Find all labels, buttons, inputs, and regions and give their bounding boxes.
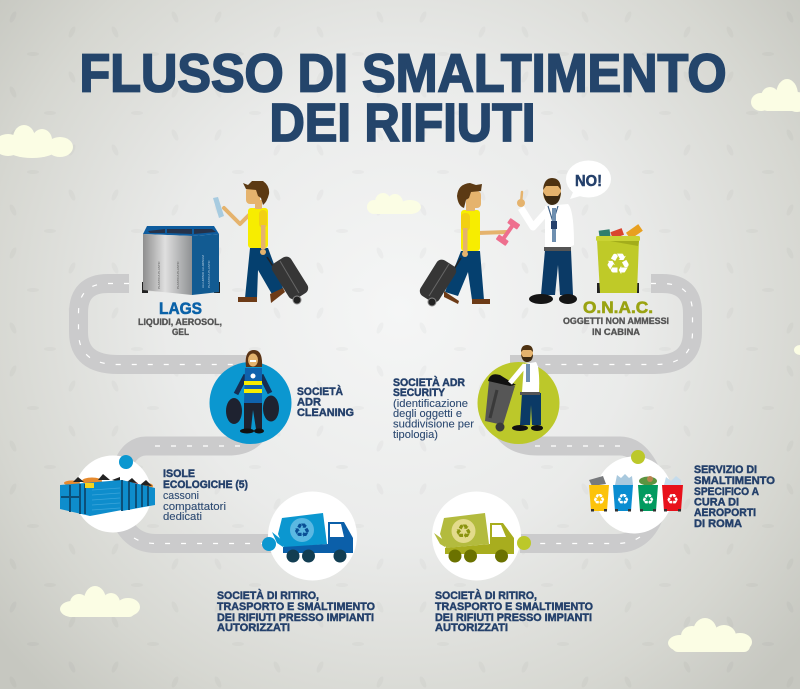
text: Società ADR Security: (identificazione	[393, 398, 468, 410]
icon: security officer	[517, 178, 577, 304]
text: Servizio di smaltimento: AEROPORTI	[694, 507, 756, 519]
text: left disposal company: DEI RIFIUTI PRESSO IMPIANTI	[217, 612, 374, 624]
icon: LAGS recycling bin: PLASTICA PLASTIC	[157, 260, 161, 289]
text: right disposal company: SOCIETÀ DI RITIRO,	[435, 589, 537, 602]
cloud: centre	[367, 193, 421, 214]
text: Società ADR Cleaning	[297, 385, 354, 419]
text: LAGS description: GEL	[172, 327, 189, 338]
text: Società ADR Security	[393, 376, 474, 441]
text: left disposal company: AUTORIZZATI	[217, 622, 290, 634]
text: Isole ecologiche: ISOLE	[163, 468, 195, 480]
text: Società ADR Security: SECURITY	[393, 387, 446, 399]
cloud: top right	[751, 79, 800, 112]
road: right side middle	[500, 425, 650, 470]
text: Servizio di smaltimento: SPECIFICO A	[694, 486, 759, 498]
callout: NO!: NO!	[575, 173, 602, 190]
callout: NO!	[566, 160, 611, 199]
text: right disposal company: AUTORIZZATI	[435, 622, 508, 634]
title	[80, 44, 726, 153]
text: Isole ecologiche: compattatori	[163, 501, 226, 513]
icon: traveller with bottle	[213, 181, 310, 304]
title: DEI RIFIUTI	[270, 94, 536, 153]
text: right disposal company: DEI RIFIUTI PRESSO IMPIANTI	[435, 612, 592, 624]
text: Isole ecologiche: dedicati	[163, 511, 202, 523]
icon: compactor containers in white circle	[60, 455, 155, 532]
icon: O.N.A.C. bin	[596, 224, 643, 293]
text: LAGS description	[138, 317, 222, 338]
text: Servizio di smaltimento: DI ROMA	[694, 518, 742, 530]
icon: cleaning operator in blue circle	[210, 350, 292, 444]
icon: O.N.A.C. bin: ♻	[605, 247, 631, 281]
icon: green recycling truck in white circle	[432, 492, 531, 580]
icon: four sorted waste bins in white circle	[589, 450, 683, 534]
text: Servizio di smaltimento: SERVIZIO DI	[694, 464, 757, 476]
text: Servizio di smaltimento: SMALTIMENTO	[694, 475, 775, 487]
icon: four sorted waste bins in white circle: ♻	[666, 492, 679, 508]
text: Società ADR Security: tipologia)	[393, 429, 438, 441]
icon: traveller with dumbbell	[418, 183, 520, 306]
text: Società ADR Security: SOCIETÀ ADR	[393, 376, 465, 389]
icon: LAGS recycling bin: ALLUMINIO ALUMINUM	[201, 255, 205, 288]
text: right disposal company	[435, 589, 593, 634]
cloud: right edge	[794, 345, 800, 355]
text: Isole ecologiche	[163, 468, 248, 523]
icon: green recycling truck in white circle: ♻	[455, 521, 472, 543]
text: Servizio di smaltimento	[694, 464, 775, 530]
text: right disposal company: TRASPORTO E SMALTIMENTO	[435, 601, 593, 613]
road: right side upper	[510, 284, 692, 364]
text: Servizio di smaltimento: CURA DI	[694, 496, 739, 508]
text: Società ADR Security: degli oggetti e	[393, 408, 462, 420]
cloud: bottom right	[668, 618, 752, 652]
icon: LAGS recycling bin	[142, 226, 220, 295]
text: left disposal company: TRASPORTO E SMALTIMENTO	[217, 601, 375, 613]
road: right side lower	[520, 510, 656, 544]
text: O.N.A.C. description	[563, 316, 669, 338]
text: O.N.A.C. description: IN CABINA	[592, 327, 640, 338]
cloud: top left	[0, 125, 73, 158]
icon: four sorted waste bins in white circle: ♻	[593, 492, 605, 508]
icon: LAGS recycling bin: PLASTICA PLASTIC	[176, 260, 180, 289]
text: Isole ecologiche: cassoni	[163, 490, 199, 502]
text: LAGS description: LIQUIDI, AEROSOL,	[138, 317, 222, 328]
text: Società ADR Cleaning: SOCIETÀ	[297, 385, 343, 398]
icon: four sorted waste bins in white circle: ♻	[642, 492, 654, 508]
heading: O.N.A.C.: O.N.A.C.	[583, 298, 653, 317]
icon: four sorted waste bins in white circle: ♻	[617, 492, 629, 508]
text: Società ADR Security: suddivisione per	[393, 418, 474, 430]
text: Società ADR Cleaning: ADR	[297, 396, 321, 408]
text: O.N.A.C. description: OGGETTI NON AMMESSI	[563, 316, 669, 327]
road: left side middle	[121, 425, 262, 470]
road: left side upper	[78, 284, 250, 364]
text: Isole ecologiche: ECOLOGICHE (5)	[163, 479, 248, 491]
cloud: bottom left	[60, 586, 140, 617]
text: Società ADR Cleaning: CLEANING	[297, 407, 354, 419]
title: FLUSSO DI SMALTIMENTO	[80, 44, 726, 104]
text: left disposal company	[217, 589, 375, 634]
text: left disposal company: SOCIETÀ DI RITIRO,	[217, 589, 319, 602]
road: left side lower	[118, 510, 272, 544]
icon: blue recycling truck in white circle: ♻	[293, 520, 311, 542]
heading: LAGS: LAGS	[159, 299, 202, 318]
icon: blue recycling truck in white circle	[262, 492, 357, 580]
icon: LAGS recycling bin: PLASTICA PLASTIC	[207, 259, 211, 288]
icon: officer with wheelie bin in green circle	[478, 345, 560, 444]
